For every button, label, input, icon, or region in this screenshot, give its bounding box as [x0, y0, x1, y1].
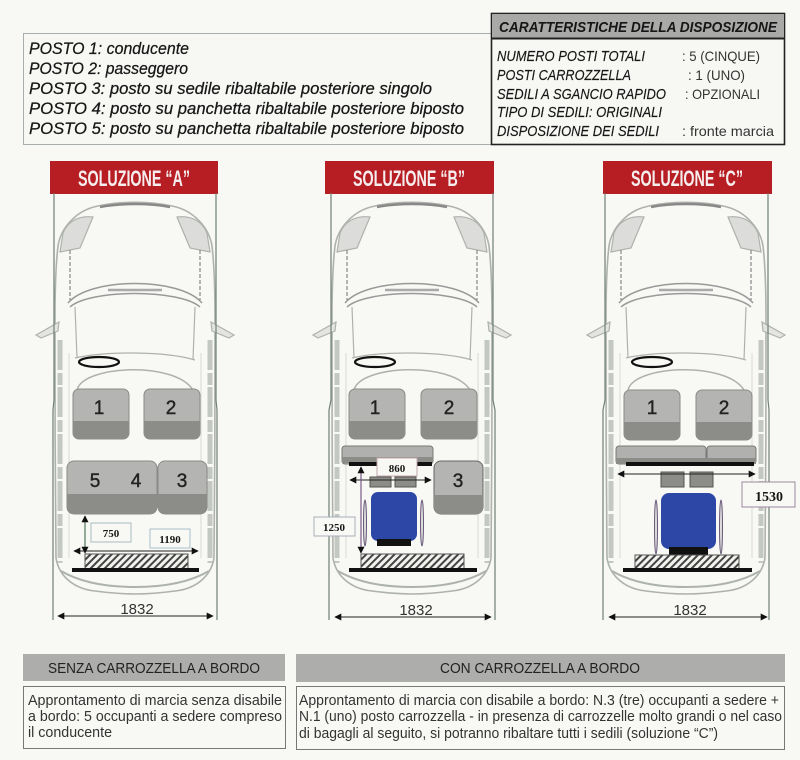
width arrow 1190	[74, 550, 198, 552]
dimension 1832: 1832	[673, 602, 707, 619]
length arrow 750	[84, 516, 86, 553]
folded seats	[616, 446, 756, 466]
panel: con carrozzella	[296, 654, 785, 750]
label 750: 750	[103, 528, 120, 540]
bench seats 5 and 4	[67, 461, 157, 514]
label 1530: 1530	[755, 490, 783, 505]
wheelchair	[654, 472, 722, 555]
label 1190: 1190	[159, 534, 181, 546]
seat 1	[349, 389, 405, 439]
row: sedili a sgancio rapido: SEDILI A SGANCIO RAPIDO	[497, 86, 666, 103]
hatched platform	[72, 554, 199, 572]
text block: di bagagli al seguito, si potranno ribaltare tutti i sedili (soluzione “C”)	[299, 725, 718, 742]
seat 1: 1	[370, 398, 380, 419]
heading: SENZA CARROZZELLA A BORDO	[48, 660, 260, 677]
heading: soluzione A	[50, 161, 218, 194]
label 860	[377, 458, 417, 476]
bench seats 5 and 4: 5	[90, 471, 100, 492]
seat 2: 2	[166, 398, 176, 419]
seat 2: 2	[444, 398, 454, 419]
text block: Approntamento di marcia con disabile a bordo: N.3 (tre) occupanti a sedere +	[299, 692, 779, 709]
car top view	[587, 202, 785, 594]
text block: Approntamento di marcia senza disabile	[28, 692, 282, 709]
seat 1: 1	[647, 398, 657, 419]
seat 1: 1	[94, 398, 104, 419]
panel heading: CARATTERISTICHE DELLA DISPOSIZIONE	[499, 19, 778, 36]
panel: caratteristiche della disposizione	[491, 14, 785, 144]
legend line: posto 5: POSTO 5: posto su panchetta ribaltabile posteriore biposto	[29, 119, 464, 138]
panel: soluzione C	[587, 161, 795, 620]
heading	[296, 654, 785, 682]
seat 3: 3	[453, 471, 463, 492]
dimension 1832: 1832	[120, 601, 154, 618]
seat 2	[144, 389, 200, 439]
heading: soluzione C: SOLUZIONE “C”	[631, 166, 743, 191]
marker ellipse	[355, 357, 395, 367]
dimension 1832: 1832	[399, 602, 433, 619]
seat 1	[73, 389, 129, 439]
width arrow 860	[350, 479, 431, 481]
seat 2	[696, 390, 752, 440]
row: posti carrozzella: POSTI CARROZZELLA	[497, 67, 631, 84]
heading: soluzione B	[325, 161, 494, 194]
label 860: 860	[389, 463, 406, 475]
wheelchair	[364, 477, 424, 546]
panel: seat legend	[24, 34, 492, 144]
legend line: posto 4: POSTO 4: posto su panchetta ribaltabile posteriore biposto	[29, 99, 464, 118]
seat 3	[158, 461, 207, 514]
heading	[23, 654, 285, 681]
width arrow 1530	[618, 473, 755, 475]
row: numero posti: : 5 (CINQUE)	[682, 48, 760, 64]
heading: soluzione A: SOLUZIONE “A”	[78, 166, 190, 191]
row: numero posti: NUMERO POSTI TOTALI	[497, 48, 645, 65]
row: posti carrozzella: : 1 (UNO)	[688, 67, 745, 83]
heading: CON CARROZZELLA A BORDO	[440, 660, 640, 677]
bench seats 5 and 4: 4	[131, 471, 142, 492]
length arrow 1250	[360, 467, 362, 553]
legend line: posto 2: POSTO 2: passeggero	[29, 59, 188, 78]
legend line: posto 3: POSTO 3: posto su sedile ribaltabile posteriore singolo	[29, 79, 432, 98]
hatched platform	[349, 554, 477, 572]
label 1250	[314, 517, 355, 536]
seat 2: 2	[719, 398, 729, 419]
hatched platform	[623, 555, 752, 572]
panel: senza carrozzella	[23, 654, 286, 748]
label 1530	[742, 482, 795, 507]
marker ellipse	[632, 357, 672, 367]
seat 3	[434, 461, 483, 514]
row: disposizione dei sedili: DISPOSIZIONE DEI SEDILI	[497, 123, 659, 140]
text block: il conducente	[28, 724, 112, 741]
seat 1	[624, 390, 680, 440]
text block	[24, 686, 286, 748]
car top view	[36, 202, 234, 594]
label 1190	[150, 529, 190, 548]
text block	[296, 686, 784, 750]
seat 2	[421, 389, 477, 439]
panel: soluzione B	[313, 161, 511, 620]
row: disposizione dei sedili: : fronte marcia	[682, 123, 774, 139]
legend line: posto 1: POSTO 1: conducente	[29, 39, 189, 58]
row: tipo di sedili: TIPO DI SEDILI: ORIGINALI	[497, 104, 662, 121]
folded bench	[342, 446, 433, 466]
label 750	[91, 523, 131, 542]
marker ellipse	[79, 357, 119, 367]
heading: soluzione C	[603, 161, 772, 194]
row: posti carrozzella	[497, 67, 745, 84]
text block: a bordo: 5 occupanti a sedere compreso	[28, 708, 282, 725]
car top view	[313, 202, 511, 594]
row: numero posti	[497, 48, 760, 65]
panel: soluzione A	[36, 161, 234, 620]
row: disposizione dei sedili	[497, 123, 774, 140]
label 1250: 1250	[323, 522, 346, 534]
row: sedili a sgancio rapido: : OPZIONALI	[685, 86, 760, 102]
heading: soluzione B: SOLUZIONE “B”	[353, 166, 465, 191]
seat 3: 3	[177, 471, 187, 492]
